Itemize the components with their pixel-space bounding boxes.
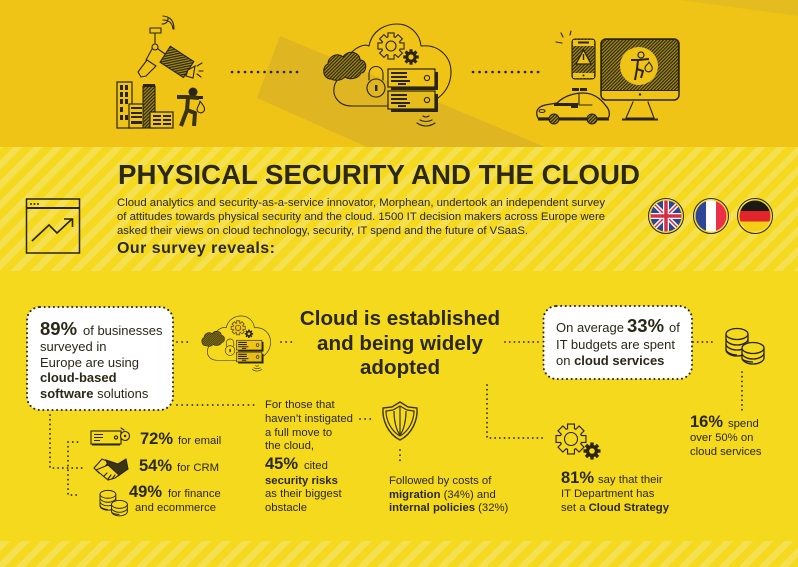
icon: browser window with rising chart [26, 199, 80, 253]
stat: 54 percent CRM: 54% [139, 457, 172, 475]
subheading: Our survey reveals: [117, 240, 275, 257]
callout: 89 percent [27, 307, 173, 410]
intro text: asked their views on cloud technology, security, IT spend and the future of VSaaS. [117, 225, 528, 237]
stat: 16 percent: spend [728, 418, 759, 430]
text: security risks obstacle: haven’t instigated [265, 413, 353, 425]
stat: 16 percent: cloud services [690, 446, 762, 458]
stat: 54 percent CRM [139, 457, 219, 475]
heading: cloud is established [300, 307, 500, 379]
callout: 33 percent: On average [556, 320, 624, 335]
stat: 81 percent: set a Cloud Strategy [561, 502, 670, 514]
flag: France [694, 198, 728, 234]
stat: 49 percent finance: for finance [168, 488, 221, 500]
dotted connector [232, 71, 298, 73]
icon: gears [557, 425, 600, 460]
text: costs and policies: Followed by costs of [389, 475, 492, 487]
callout: 89 percent: cloud-based [40, 370, 117, 385]
title: PHYSICAL SECURITY AND THE CLOUD [118, 159, 640, 190]
icon: large cloud with servers [324, 24, 451, 126]
icon: small cloud with servers [202, 316, 271, 371]
text: security risks obstacle: obstacle [265, 502, 307, 514]
text: security risks obstacle: as their biggest [265, 488, 342, 500]
text: security risks obstacle: a full move to [265, 427, 332, 439]
striped header band [0, 147, 798, 271]
icon: phone, car and monitor [537, 31, 679, 124]
heading: cloud is established: adopted [360, 356, 440, 379]
stat: 81 percent: 81% [561, 469, 594, 487]
icon: surveillance camera, city and thief [117, 16, 205, 128]
stat: 81 percent [561, 469, 670, 514]
callout: 89 percent: of businesses [83, 323, 163, 338]
dotted connectors around small cloud [177, 342, 295, 405]
callout: 33 percent [544, 306, 692, 379]
intro text: of attitudes towards physical security and the cloud. 1500 IT decision makers across Europe were [117, 211, 605, 223]
text: costs and policies: internal policies (32%) [389, 502, 509, 514]
callout: 33 percent: IT budgets are spent [556, 337, 675, 352]
stat: 72 percent email: 72% [140, 430, 173, 448]
stat: 16 percent [690, 413, 762, 458]
heading: cloud is established: and being widely [317, 332, 484, 355]
callout: 33 percent: on cloud services [556, 353, 664, 368]
striped footer band [0, 541, 798, 567]
text: security risks obstacle: the cloud, [265, 440, 314, 452]
stat: 72 percent email [140, 430, 221, 448]
icon: coins large [726, 328, 764, 364]
icon: shield [383, 402, 417, 440]
icon: coins small [100, 490, 127, 516]
flag: UK [648, 198, 684, 234]
callout: 89 percent: surveyed in [40, 339, 106, 354]
stat: 49 percent finance: and ecommerce [135, 502, 216, 514]
text: costs and policies [389, 475, 509, 514]
text: security risks obstacle: For those that [265, 399, 336, 411]
text: security risks obstacle: security risks [265, 475, 338, 487]
stat: 54 percent CRM: for CRM [177, 462, 219, 474]
intro text [117, 197, 605, 237]
heading: cloud is established: Cloud is established [300, 307, 500, 330]
flag: Germany [738, 198, 772, 234]
text: security risks obstacle: cited [304, 460, 328, 472]
text: security risks obstacle: 45% [265, 455, 298, 473]
stat: 72 percent email: for email [178, 435, 221, 447]
top banner background [0, 0, 798, 148]
stat: 16 percent: over 50% on [690, 432, 753, 444]
stat: 81 percent: IT Department has [561, 488, 655, 500]
stat: 81 percent: say that their [598, 474, 663, 486]
dotted connector [473, 71, 539, 73]
callout: 89 percent: Europe are using [40, 355, 139, 370]
callout: 89 percent: software solutions [40, 386, 149, 401]
dotted connector tree [50, 415, 82, 495]
callout: 33 percent: of [669, 320, 680, 335]
callout: 33 percent: 33% [627, 315, 664, 336]
main yellow panel [0, 271, 798, 541]
intro text: Cloud analytics and security-as-a-service innovator, Morphean, undertook an independent survey [117, 197, 605, 209]
icon: handshake [94, 459, 128, 480]
text: security risks obstacle [265, 399, 353, 514]
dotted connectors near shield [360, 419, 400, 464]
stat: 49 percent finance [129, 483, 221, 514]
text: costs and policies: migration (34%) and [389, 489, 496, 501]
stat: 49 percent finance: 49% [129, 483, 162, 501]
dotted connectors right of heading [487, 342, 742, 438]
icon: server key [91, 428, 130, 446]
callout: 89 percent: 89% [40, 318, 77, 339]
stat: 16 percent: 16% [690, 413, 723, 431]
